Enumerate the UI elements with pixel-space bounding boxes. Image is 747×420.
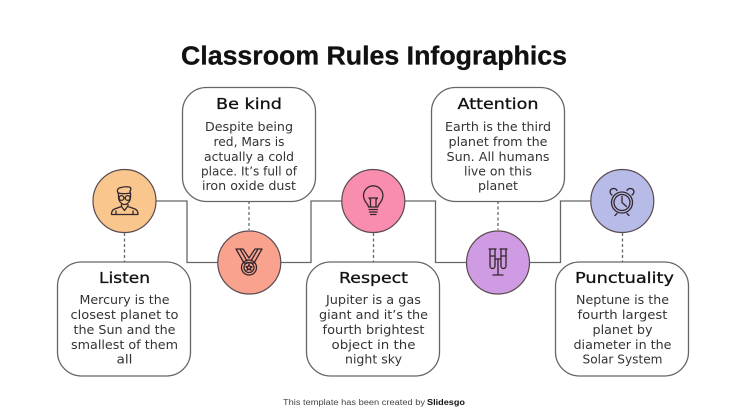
text: respect: giant and it’s the — [319, 308, 428, 322]
panel: listen — [58, 262, 190, 376]
text: punctuality: Neptune is the — [576, 293, 669, 307]
icon: test tubes in purple circle — [466, 231, 530, 294]
text: attention: Sun. All humans — [446, 150, 550, 164]
text: punctuality: planet by — [592, 323, 652, 337]
text: punctuality: diameter in the — [574, 338, 672, 352]
text: listen: the Sun and the — [74, 323, 176, 337]
heading: be kind: Be kind — [216, 95, 282, 113]
text: be kind: actually a cold — [204, 150, 294, 164]
text: respect: Jupiter is a gas — [325, 293, 421, 307]
text: listen: Mercury is the — [80, 293, 170, 307]
text: attention — [445, 120, 551, 193]
text: listen: closest planet to — [70, 308, 178, 322]
icon: medal in salmon circle — [218, 231, 281, 294]
text: be kind: place. It’s full of — [201, 164, 298, 178]
text: respect — [319, 293, 428, 366]
text: attention: planet from the — [448, 135, 548, 149]
heading: respect: Respect — [339, 269, 408, 287]
icon: light bulb in pink circle — [342, 170, 405, 232]
text: respect: object in the — [332, 338, 416, 352]
icon: student in orange circle — [93, 170, 156, 232]
title: Classroom Rules Infographics — [181, 42, 567, 70]
connector line — [156, 201, 591, 262]
text: punctuality — [574, 293, 672, 366]
text: listen: all — [116, 352, 132, 366]
text: punctuality: Solar System — [582, 352, 662, 366]
panel: attention — [432, 88, 564, 202]
text: punctuality: fourth largest — [578, 308, 668, 322]
text: attention: planet — [478, 179, 518, 193]
text: attention: live on this — [464, 164, 532, 178]
panel: punctuality — [556, 262, 688, 376]
heading: listen: Listen — [99, 269, 150, 287]
text: attention: Earth is the third — [445, 120, 551, 134]
panel: respect — [306, 262, 440, 376]
dashed connectors — [124, 201, 622, 262]
text: respect: night sky — [345, 352, 402, 366]
text: respect: fourth brightest — [322, 323, 425, 337]
panel: be kind — [182, 88, 316, 202]
footer credit: This template has been created by — [283, 398, 425, 407]
heading: punctuality: Punctuality — [575, 269, 674, 287]
text: listen: smallest of them — [71, 338, 178, 352]
text: be kind: iron oxide dust — [202, 179, 296, 193]
footer brand: Slidesgo — [427, 398, 465, 407]
text: be kind — [201, 120, 298, 193]
text: listen — [70, 293, 178, 366]
text: be kind: red, Mars is — [214, 135, 284, 149]
icon: alarm clock in lavender circle — [591, 170, 654, 232]
text: be kind: Despite being — [205, 120, 293, 134]
heading: attention: Attention — [458, 95, 538, 113]
